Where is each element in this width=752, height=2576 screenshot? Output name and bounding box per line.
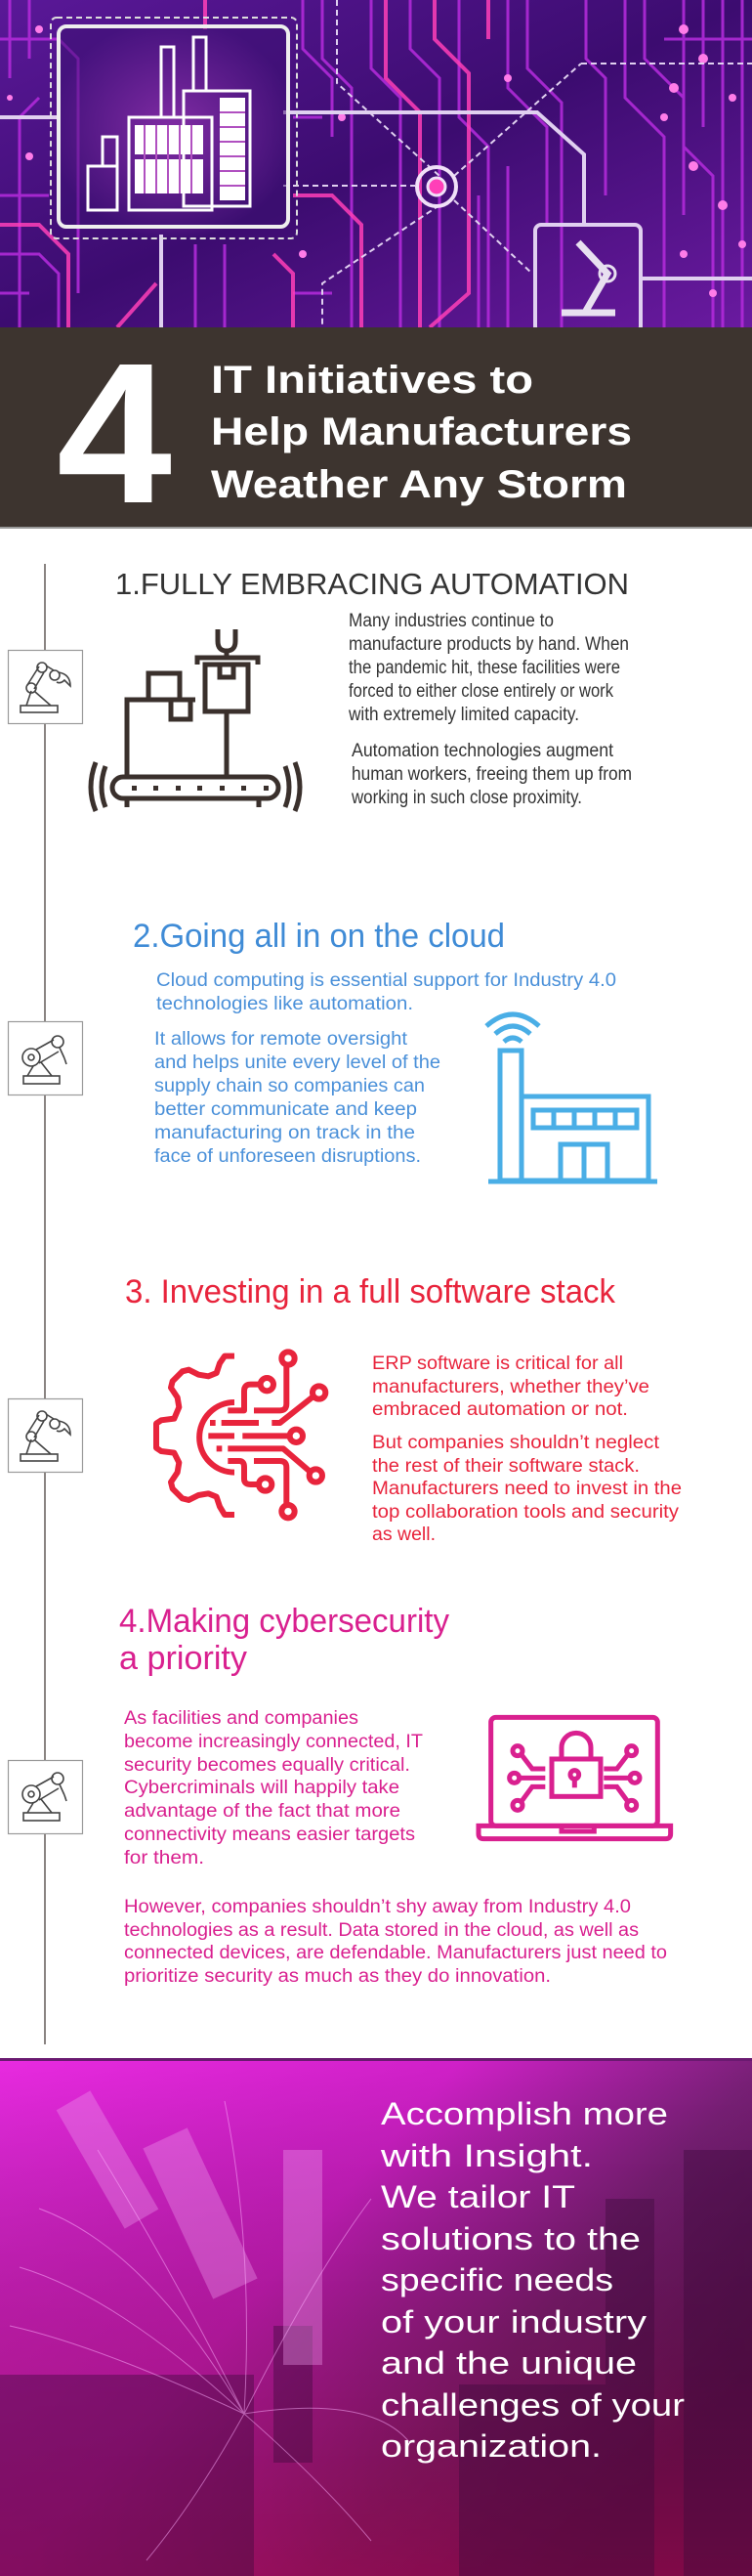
- section 4 text: [124, 1708, 423, 1868]
- big number 4: 4: [57, 322, 172, 545]
- section 4 heading: 4.Making cybersecurity: [119, 1603, 449, 1640]
- section 1 text: [348, 611, 632, 808]
- section 3 text: the rest of their software stack.: [372, 1456, 640, 1477]
- icon: gear circuit: [156, 1352, 325, 1518]
- section 4 closing text: However, companies shouldn’t shy away from Industry 4.0: [124, 1897, 631, 1917]
- section 4 heading: [119, 1603, 449, 1677]
- section 2 text: supply chain so companies can: [154, 1076, 425, 1096]
- footer image: welding robots: [0, 2058, 752, 2576]
- section 3 text: manufacturers, whether they’ve: [372, 1377, 649, 1397]
- title banner: [0, 322, 752, 545]
- section 4 text: Cybercriminals will happily take: [124, 1778, 399, 1798]
- section 4 heading: a priority: [119, 1640, 247, 1677]
- section 2 text: manufacturing on track in the: [154, 1123, 415, 1143]
- icon: conveyor belt: [91, 629, 300, 811]
- title text: Weather Any Storm: [211, 463, 627, 506]
- icon: connected factory: [486, 1014, 657, 1181]
- section 2 heading: 2.Going all in on the cloud: [133, 918, 505, 955]
- title text: [211, 359, 632, 506]
- section 4 closing text: technologies as a result. Data stored in the cloud, as well as: [124, 1920, 639, 1941]
- section 1 text: the pandemic hit, these facilities were: [349, 658, 620, 678]
- timeline icon 3: [8, 1399, 82, 1472]
- title text: IT Initiatives to: [211, 359, 533, 402]
- section 2 text: Cloud computing is essential support for Industry 4.0: [156, 970, 616, 991]
- section 3 text: But companies shouldn’t neglect: [372, 1433, 660, 1453]
- section 3 text: top collaboration tools and security: [372, 1502, 680, 1523]
- section 3 text: ERP software is critical for all: [372, 1353, 623, 1374]
- call to action text: and the unique: [381, 2345, 637, 2381]
- call to action text: of your industry: [381, 2304, 647, 2340]
- call to action text: solutions to the: [381, 2221, 641, 2256]
- section 2 text: It allows for remote oversight: [154, 1029, 408, 1050]
- section 1 text: forced to either close entirely or work: [349, 681, 613, 702]
- call to action text: organization.: [381, 2428, 602, 2464]
- section 2 text: technologies like automation.: [156, 994, 413, 1014]
- call to action text: [380, 2096, 685, 2464]
- section 3 text: Manufacturers need to invest in the: [372, 1479, 682, 1499]
- section 2 text: better communicate and keep: [154, 1099, 417, 1120]
- section 3 text: [372, 1353, 682, 1545]
- icon: robot arm box: [535, 225, 641, 332]
- section 3 heading: 3. Investing in a full software stack: [125, 1273, 616, 1310]
- section 1 text: with extremely limited capacity.: [348, 705, 579, 725]
- section 4 closing text: [124, 1897, 667, 1987]
- section 2 text: face of unforeseen disruptions.: [154, 1146, 421, 1167]
- section 4 text: for them.: [124, 1848, 204, 1868]
- icon: gear node: [417, 167, 456, 206]
- call to action text: Accomplish more: [381, 2096, 668, 2131]
- timeline icon 1: [8, 651, 82, 723]
- call to action text: We tailor IT: [381, 2179, 575, 2214]
- section 1 text: Automation technologies augment: [352, 741, 614, 761]
- hero image: circuit board: [0, 0, 752, 332]
- title text: Help Manufacturers: [211, 410, 632, 453]
- section 4 text: advantage of the fact that more: [124, 1801, 400, 1822]
- section 1 text: human workers, freeing them up from: [352, 764, 632, 785]
- timeline line: [44, 564, 46, 2044]
- section 3 text: embraced automation or not.: [372, 1399, 628, 1420]
- section 3 text: as well.: [372, 1524, 436, 1545]
- section 4 text: As facilities and companies: [124, 1708, 358, 1729]
- call to action text: specific needs: [381, 2262, 613, 2297]
- section 4 text: become increasingly connected, IT: [124, 1732, 423, 1752]
- section 4 text: security becomes equally critical.: [124, 1755, 410, 1776]
- section 4 closing text: connected devices, are defendable. Manufacturers just need to: [124, 1943, 667, 1963]
- icon: laptop lock: [479, 1717, 671, 1839]
- section 1 text: working in such close proximity.: [351, 788, 582, 808]
- section 2 text: and helps unite every level of the: [154, 1052, 440, 1073]
- section 1 text: manufacture products by hand. When: [349, 634, 629, 655]
- timeline icon 4: [8, 1761, 82, 1833]
- section 4 closing text: prioritize security as much as they do innovation.: [124, 1966, 551, 1987]
- section 1 heading: 1.FULLY EMBRACING AUTOMATION: [115, 567, 629, 601]
- icon: factory in hero: [49, 18, 298, 239]
- timeline icon 2: [8, 1022, 82, 1095]
- section 1 text: Many industries continue to: [349, 611, 554, 631]
- section 2 text: [154, 970, 616, 1167]
- call to action text: with Insight.: [380, 2138, 593, 2173]
- call to action text: challenges of your: [381, 2387, 685, 2423]
- section 4 text: connectivity means easier targets: [124, 1825, 415, 1845]
